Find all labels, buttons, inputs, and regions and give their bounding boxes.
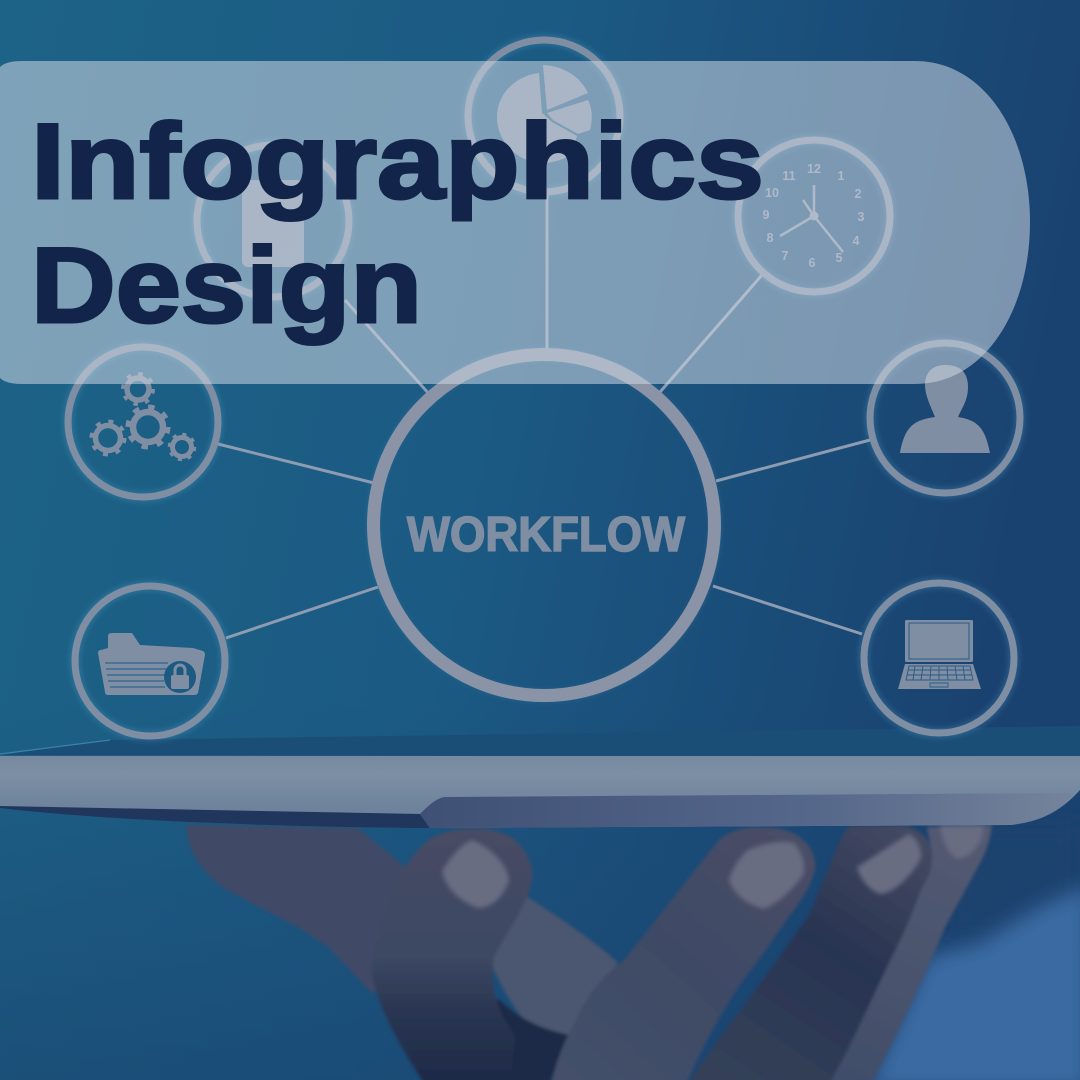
middle nail	[857, 834, 921, 894]
glow rings	[68, 40, 1020, 736]
tablet	[0, 726, 1080, 828]
clock numerals: 7	[782, 249, 789, 263]
palm shadow	[376, 990, 570, 1080]
hand	[186, 825, 992, 1080]
clock numerals: 11	[782, 169, 796, 183]
node: phone	[197, 145, 349, 297]
gear icons	[92, 374, 194, 460]
clock numerals: 5	[836, 251, 843, 265]
index finger	[550, 828, 815, 1080]
node: person	[870, 343, 1020, 493]
clock numerals: 3	[858, 210, 865, 224]
clock centre	[810, 212, 818, 220]
folder icon	[98, 633, 205, 695]
clock numerals: 2	[855, 187, 862, 201]
thumb	[372, 828, 532, 1080]
clock hands	[780, 185, 843, 252]
clock numerals: 12	[807, 162, 821, 176]
title line 2: Design	[31, 225, 422, 345]
dark area right of hand	[950, 820, 1080, 940]
tablet body	[0, 756, 1080, 828]
clock numerals: 4	[853, 234, 860, 248]
title line 1: Infographics	[31, 101, 764, 221]
node: folder	[75, 586, 225, 736]
phone icon	[242, 180, 304, 267]
tablet screen edge	[0, 726, 1080, 756]
tablet underside shadow	[0, 800, 440, 828]
node: pie chart	[468, 40, 620, 192]
laptop screen	[905, 620, 973, 662]
fingernails	[442, 826, 984, 909]
ring finger	[826, 825, 992, 1080]
central hub	[374, 354, 714, 696]
clock numerals: 8	[767, 231, 774, 245]
clock numerals: 9	[763, 208, 770, 222]
clock numerals	[763, 162, 865, 270]
node: laptop	[864, 583, 1014, 733]
laptop keyboard	[906, 666, 973, 687]
thumb nail	[442, 840, 509, 908]
ring nail	[940, 826, 984, 859]
clock numerals: 6	[809, 256, 816, 270]
tablet underside	[420, 793, 1074, 828]
workflow diagram	[68, 40, 1020, 736]
shirt sleeve	[866, 885, 1080, 1080]
connector lines	[218, 190, 870, 638]
clock numerals: 10	[765, 186, 779, 200]
phone screen	[245, 186, 301, 256]
folder lines	[105, 663, 168, 687]
hub label: WORKFLOW	[407, 508, 686, 562]
person icon	[900, 365, 990, 453]
index nail	[729, 842, 804, 909]
pie icon	[497, 65, 592, 163]
wrist	[186, 825, 450, 993]
node: clock	[738, 140, 890, 292]
lock badge	[164, 661, 196, 693]
palm web	[490, 880, 618, 1060]
clock numerals: 1	[838, 169, 845, 183]
lock shackle	[175, 665, 185, 675]
middle finger	[684, 826, 932, 1080]
laptop base	[898, 664, 981, 689]
title panel	[0, 61, 1030, 384]
screen highlight	[0, 740, 110, 754]
lock body	[171, 675, 189, 689]
laptop screen inset	[909, 623, 969, 659]
title	[31, 101, 764, 345]
node: gears	[68, 347, 218, 497]
